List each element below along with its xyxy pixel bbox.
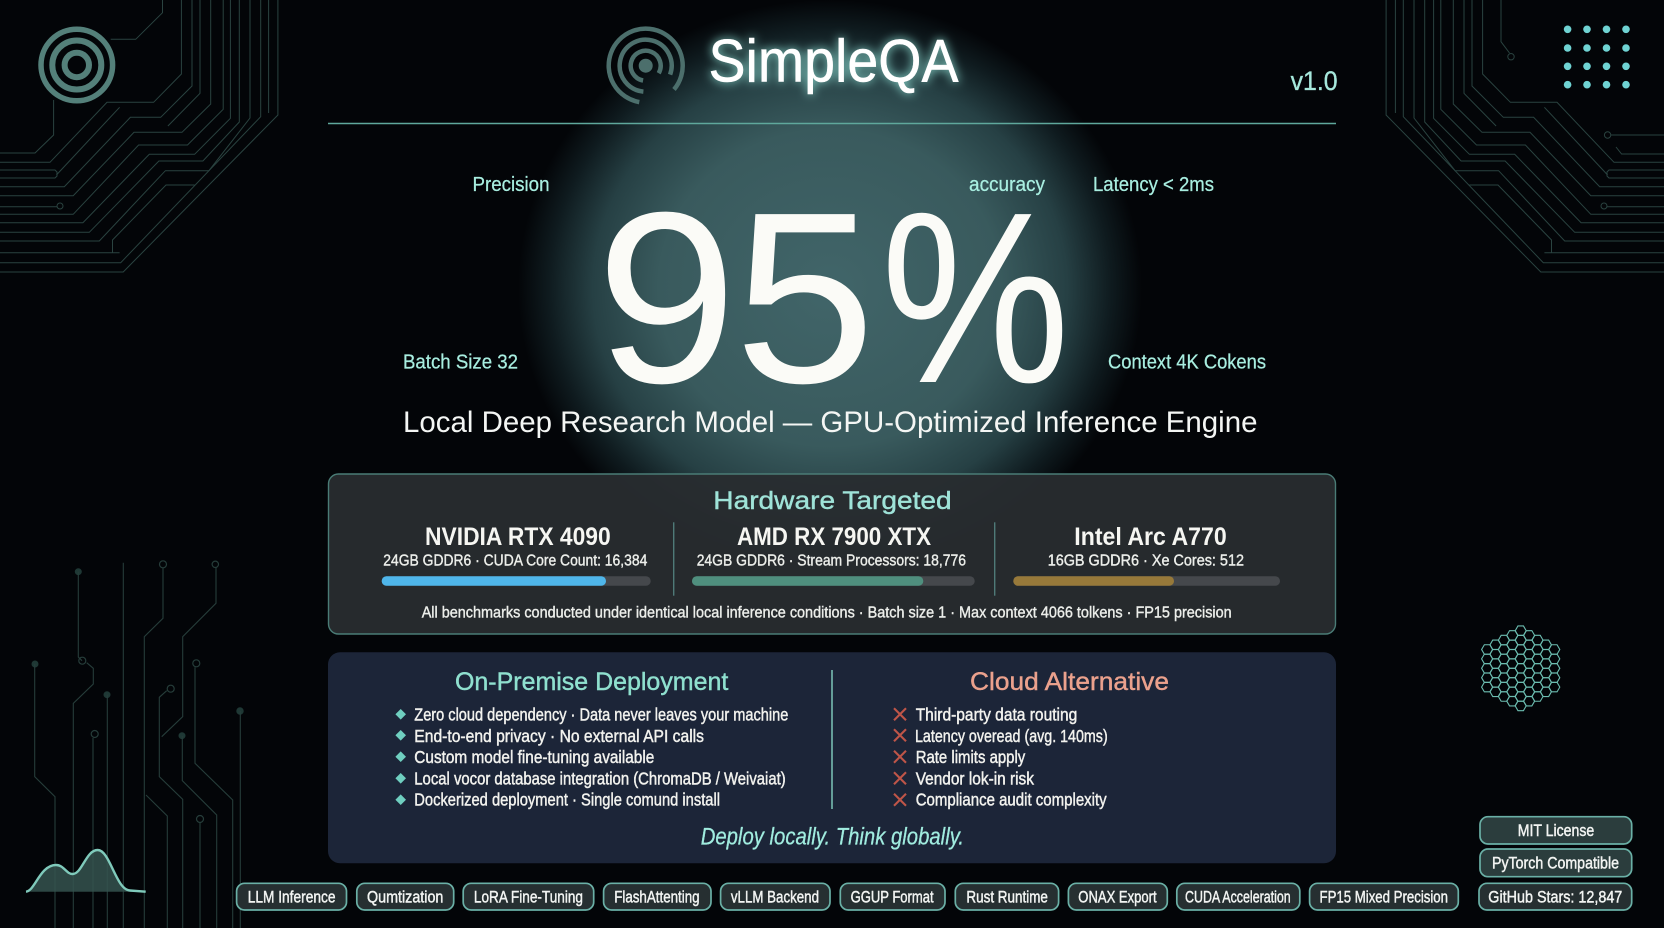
badge: PyTorch Compatible: [1480, 849, 1632, 877]
chip: FP15 Mixed Precision: [1310, 883, 1458, 910]
label: precision: Precision: [472, 173, 550, 196]
chip: GGUP Format: GGUP Format: [851, 888, 934, 906]
chip: Qumtization: Qumtization: [367, 888, 443, 906]
chip: LoRA Fine-Tuning: LoRA Fine-Tuning: [474, 888, 583, 906]
gpu: nvidia: [382, 523, 651, 586]
on-premise list: Dockerized deployment · Single comund install: [414, 790, 720, 810]
chip: vLLM Backend: [721, 883, 830, 910]
heading: cloud: Cloud Alternative: [970, 668, 1169, 696]
benchmark note: All benchmarks conducted under identical local inference conditions · Batch size 1 · Max context 4066 tolkens · FP15 precision: [422, 605, 1232, 622]
gpu: nvidia: 24GB GDDR6 · CUDA Core Count: 16,384: [383, 553, 647, 570]
cloud list: Vendor lok-in risk: [916, 768, 1034, 788]
chip: LLM Inference: [237, 883, 346, 910]
chip: LLM Inference: LLM Inference: [248, 888, 336, 906]
chip: vLLM Backend: vLLM Backend: [731, 888, 819, 906]
subtitle: Local Deep Research Model — GPU-Optimized Inference Engine: [403, 406, 1258, 439]
chip: LoRA Fine-Tuning: [463, 883, 594, 910]
cloud list: Compliance audit complexity: [916, 790, 1107, 810]
gpu: amd: AMD RX 7900 XTX: [737, 523, 931, 551]
chip: Rust Runtime: [955, 883, 1059, 910]
circuit traces: top left: [0, 0, 278, 272]
badge: PyTorch Compatible: PyTorch Compatible: [1492, 854, 1619, 872]
heading: Hardware Targeted: [713, 487, 952, 515]
version label: v1.0: [1291, 66, 1338, 96]
label: context: Context 4K Cokens: [1108, 350, 1266, 374]
heading: on-premise: On-Premise Deployment: [455, 668, 728, 696]
gpu: intel: [1013, 523, 1280, 586]
chip: CUDA Acceleration: CUDA Acceleration: [1185, 888, 1291, 906]
chip: ONAX Export: [1068, 883, 1167, 910]
label: latency: Latency < 2ms: [1093, 173, 1214, 196]
icon: area sparkline: [26, 850, 146, 892]
on-premise list: Zero cloud dependency · Data never leaves your machine: [414, 704, 788, 724]
gpu: amd: [692, 523, 975, 586]
icon: concentric target logo: [41, 29, 113, 101]
panel: deployment comparison: [328, 652, 1336, 863]
badge: GitHub Stars: [1479, 883, 1632, 910]
chip: GGUP Format: [840, 883, 945, 910]
central radial glow: [518, 0, 1142, 576]
chip: Qumtization: [357, 883, 454, 910]
on-premise list: End-to-end privacy · No external API calls: [414, 726, 704, 746]
cloud list: Third-party data routing: [916, 704, 1077, 724]
chip: Rust Runtime: Rust Runtime: [966, 888, 1048, 906]
hero metric: [596, 161, 1070, 434]
chip: FlashAttenting: FlashAttenting: [614, 888, 700, 906]
chip: FP15 Mixed Precision: FP15 Mixed Precision: [1320, 888, 1448, 906]
cloud list: [894, 704, 1108, 810]
icon: hexagon cluster: [1482, 626, 1560, 711]
cloud list: Rate limits apply: [916, 747, 1026, 767]
badge: MIT License: [1480, 817, 1632, 844]
on-premise list: Local vocor database integration (ChromaDB / Weivaiat): [414, 768, 786, 788]
gpu: intel: Intel Arc A770: [1074, 523, 1227, 551]
icon: dot grid: [1564, 26, 1630, 88]
panel: hardware targeted: [328, 474, 1336, 634]
circuit extras: top left: [0, 0, 162, 153]
chip: CUDA Acceleration: [1177, 883, 1300, 910]
icon: broadcast logo: [609, 29, 683, 102]
on-premise list: [395, 704, 788, 810]
chip: ONAX Export: ONAX Export: [1078, 888, 1157, 906]
badge: MIT License: MIT License: [1518, 822, 1594, 840]
on-premise list: Custom model fine-tuning available: [414, 747, 654, 767]
circuit traces: bottom left: [32, 561, 243, 928]
label: batch size: Batch Size 32: [403, 350, 518, 374]
hero metric: %: [881, 162, 1070, 434]
cloud list: Latency overead (avg. 140ms): [915, 726, 1108, 746]
gpu: amd: 24GB GDDR6 · Stream Processors: 18,776: [697, 553, 966, 570]
gpu: intel: 16GB GDDR6 · Xe Cores: 512: [1048, 553, 1244, 570]
header divider: [328, 122, 1336, 124]
tag chips row: [237, 883, 1458, 910]
label: accuracy: accuracy: [969, 173, 1046, 196]
badge: GitHub Stars: GitHub Stars: 12,847: [1488, 889, 1622, 907]
circuit extras: top right: [1501, 0, 1664, 154]
chip: FlashAttenting: [604, 883, 711, 910]
gpu: nvidia: NVIDIA RTX 4090: [425, 523, 611, 551]
title: SimpleQA: [708, 28, 958, 94]
tagline: Deploy locally. Think globally.: [701, 823, 964, 850]
circuit traces: top right: [1386, 0, 1664, 272]
hero metric: 95: [596, 161, 875, 434]
